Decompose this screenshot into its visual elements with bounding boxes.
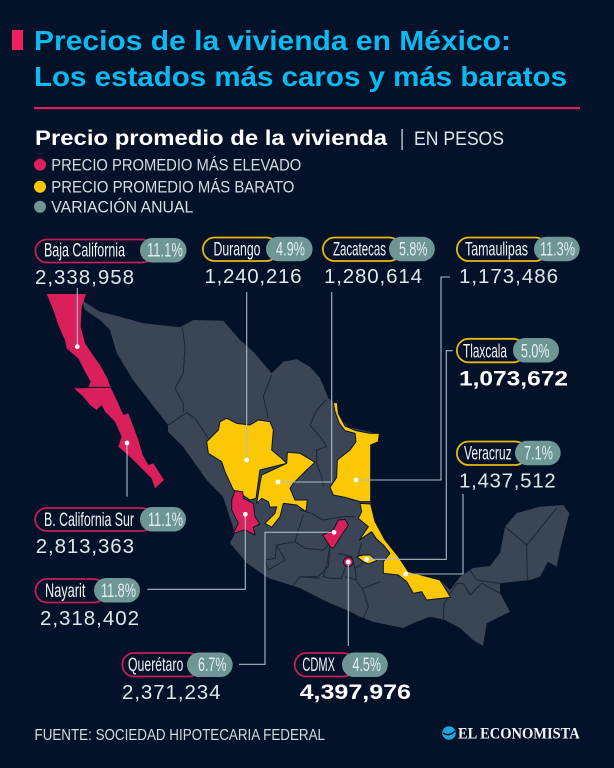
leader line: CDMX xyxy=(346,560,351,646)
label: Querétaro: 2,371,234 xyxy=(122,681,220,704)
label: Durango: Durango xyxy=(214,238,261,260)
leader line: Veracruz xyxy=(403,494,463,576)
Veracruz, Querétaro and Tlaxcala xyxy=(323,503,451,600)
label: Veracruz: Veracruz xyxy=(464,442,512,464)
label: Durango xyxy=(203,237,313,288)
label: Veracruz: 7.1% xyxy=(524,442,553,464)
label: Tlaxcala: 1,073,672 xyxy=(459,368,568,391)
label: CDMX xyxy=(295,652,411,704)
Tamaulipas xyxy=(330,403,379,502)
leader line: Nayarit xyxy=(147,512,248,589)
title block xyxy=(12,25,567,92)
state borders northeast and southeast xyxy=(300,398,557,620)
label: Querétaro: 6.7% xyxy=(198,654,226,676)
subheading xyxy=(35,127,504,150)
land mass xyxy=(82,300,569,646)
label: Durango: 1,240,216 xyxy=(204,265,302,288)
label: Tamaulipas xyxy=(457,237,580,288)
legend: PRECIO PROMEDIO MÁS BARATO xyxy=(51,177,294,196)
Baja California and Baja California Sur xyxy=(47,294,164,488)
Zacatecas and Nayarit xyxy=(232,452,315,535)
label: Tlaxcala: 5.0% xyxy=(521,340,550,362)
label: CDMX: CDMX xyxy=(302,654,335,676)
label: Veracruz xyxy=(457,441,561,493)
label: CDMX: 4.5% xyxy=(352,654,381,676)
label: Zacatecas: 5.8% xyxy=(399,238,428,260)
map of Mexico xyxy=(47,294,569,646)
label: Durango: 4.9% xyxy=(276,238,305,260)
label: Querétaro: Querétaro xyxy=(128,654,183,676)
label: Nayarit xyxy=(35,578,140,630)
label: Tlaxcala: Tlaxcala xyxy=(463,340,507,362)
legend: PRECIO PROMEDIO MÁS ELEVADO xyxy=(51,155,301,174)
state borders center xyxy=(265,515,380,618)
label: CDMX: 4,397,976 xyxy=(300,681,411,704)
legend xyxy=(34,155,301,216)
subheading: EN PESOS xyxy=(414,129,504,150)
subheading: Precio promedio de la vivienda xyxy=(35,127,387,150)
leader line: Zacatecas xyxy=(276,292,332,484)
label: Nayarit: 2,318,402 xyxy=(40,607,139,630)
CDMX marker xyxy=(344,557,353,567)
Durango xyxy=(207,418,287,500)
label: B. California Sur: B. California Sur xyxy=(44,509,134,531)
label: Veracruz: 1,437,512 xyxy=(459,470,556,493)
label: Querétaro xyxy=(122,652,233,704)
label: Tlaxcala xyxy=(457,338,568,391)
label: Tamaulipas: Tamaulipas xyxy=(465,238,528,260)
logo: El Economista: EL ECONOMISTA xyxy=(458,726,580,743)
leader line: Tlaxcala xyxy=(364,351,453,562)
label: Tamaulipas: 1,173,486 xyxy=(459,265,558,288)
title block: Los estados más caros y más baratos xyxy=(34,61,567,92)
source note: FUENTE: SOCIEDAD HIPOTECARIA FEDERAL xyxy=(34,727,325,744)
label: Baja California xyxy=(35,238,186,289)
label: Baja California: Baja California xyxy=(44,240,125,262)
label: Zacatecas xyxy=(323,237,435,288)
label: Zacatecas: Zacatecas xyxy=(333,238,386,260)
label: Zacatecas: 1,280,614 xyxy=(324,265,422,288)
leader line: Querétaro xyxy=(239,530,336,664)
leader line: Durango xyxy=(244,292,249,462)
label: B. California Sur: 2,813,363 xyxy=(36,535,134,558)
label: Tamaulipas: 11.3% xyxy=(540,238,575,260)
label: B. California Sur: 11.1% xyxy=(148,509,183,531)
label: Baja California: 2,338,958 xyxy=(35,266,134,289)
leader line: Baja California xyxy=(75,288,80,349)
leader line: Tamaulipas xyxy=(354,277,450,482)
state borders north xyxy=(168,327,272,438)
label: Nayarit: Nayarit xyxy=(45,580,86,602)
label: Nayarit: 11.8% xyxy=(101,580,136,602)
leader line: Baja California Sur xyxy=(125,441,129,497)
label: B. California Sur xyxy=(35,507,186,558)
label: Baja California: 11.1% xyxy=(147,240,183,262)
legend: VARIACIÓN ANUAL xyxy=(51,197,193,216)
title block: Precios de la vivienda en México: xyxy=(34,25,511,56)
